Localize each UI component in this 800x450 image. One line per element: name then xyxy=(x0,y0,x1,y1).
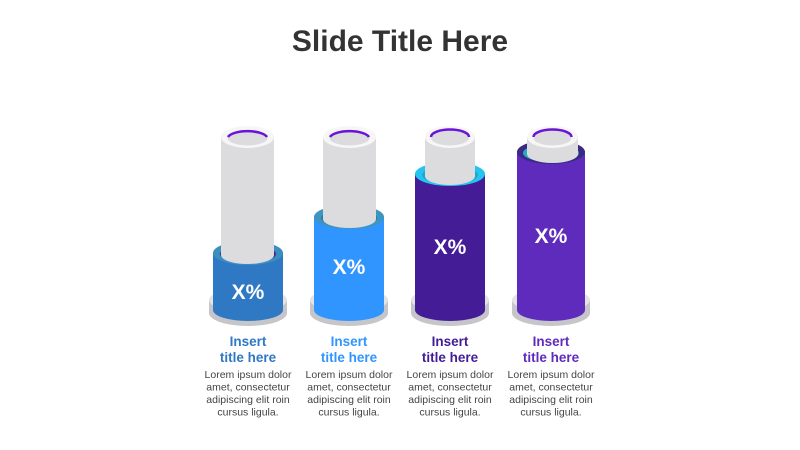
value: X% xyxy=(232,281,265,304)
heading: Insert xyxy=(432,334,469,349)
value: X% xyxy=(535,225,568,248)
body text: adipiscing elit roin xyxy=(408,394,492,406)
column 2 xyxy=(306,126,393,418)
body text: adipiscing elit roin xyxy=(307,394,391,406)
inner tube xyxy=(221,126,274,264)
title: Slide Title Here xyxy=(292,25,508,58)
body text: amet, consectetur xyxy=(307,382,391,394)
base disc xyxy=(411,288,489,326)
cylinder body xyxy=(415,162,485,321)
heading: Insert xyxy=(331,334,368,349)
body text: amet, consectetur xyxy=(206,382,290,394)
column 3 xyxy=(407,126,494,418)
base disc xyxy=(209,288,287,326)
body text: adipiscing elit roin xyxy=(206,394,290,406)
heading: title here xyxy=(422,350,479,365)
heading: title here xyxy=(220,350,277,365)
cylinder body xyxy=(213,241,283,321)
column 4 xyxy=(508,126,595,418)
column 1 xyxy=(205,126,292,418)
base disc xyxy=(512,288,590,326)
body text: Lorem ipsum dolor xyxy=(508,369,595,381)
cylinder body xyxy=(517,140,585,321)
value: X% xyxy=(434,236,467,259)
body text: Lorem ipsum dolor xyxy=(407,369,494,381)
inner tube xyxy=(425,126,475,185)
heading: Insert xyxy=(533,334,570,349)
base disc xyxy=(310,288,388,326)
body text: cursus ligula. xyxy=(419,406,481,418)
body text: Lorem ipsum dolor xyxy=(205,369,292,381)
body text: adipiscing elit roin xyxy=(509,394,593,406)
cylinder body xyxy=(314,205,384,321)
body text: cursus ligula. xyxy=(520,406,582,418)
heading: Insert xyxy=(230,334,267,349)
body text: cursus ligula. xyxy=(217,406,279,418)
inner tube xyxy=(323,126,376,228)
body text: amet, consectetur xyxy=(509,382,593,394)
body text: amet, consectetur xyxy=(408,382,492,394)
body text: Lorem ipsum dolor xyxy=(306,369,393,381)
heading: title here xyxy=(321,350,378,365)
value: X% xyxy=(333,256,366,279)
inner tube xyxy=(527,126,578,163)
heading: title here xyxy=(523,350,580,365)
body text: cursus ligula. xyxy=(318,406,380,418)
